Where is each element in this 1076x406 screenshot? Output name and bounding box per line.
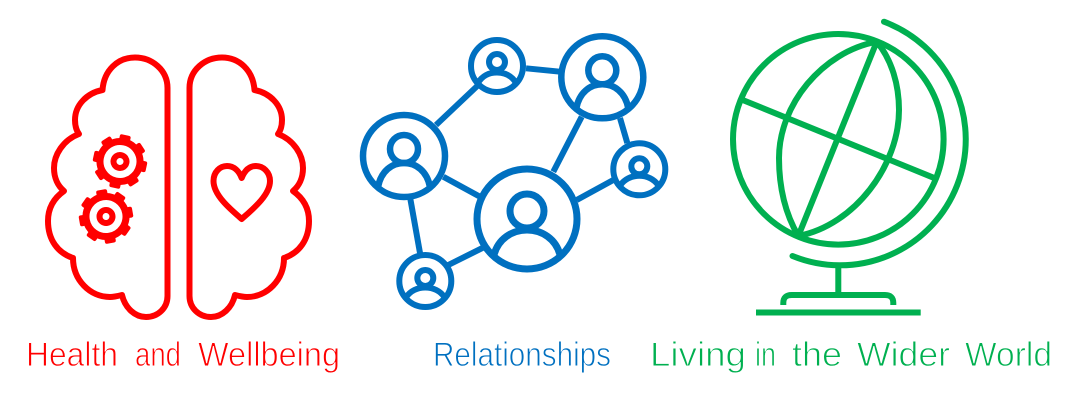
network connecting lines: [410, 68, 627, 265]
person node: right small: [613, 143, 665, 195]
label: Living in the Wider World: Wider: [857, 336, 950, 374]
person node: centre large: [477, 169, 577, 269]
label: Living in the Wider World: Living: [650, 336, 746, 374]
label: Health and Wellbeing: Health: [26, 336, 118, 374]
globe stem: [835, 265, 841, 293]
person node: left: [363, 115, 445, 197]
label: Living in the Wider World: the: [792, 336, 842, 374]
globe base: [783, 295, 893, 305]
person node: bottom small: [399, 255, 451, 307]
globe equator: [743, 100, 935, 178]
label: Health and Wellbeing: [26, 336, 340, 374]
right brain hemisphere: [190, 58, 309, 317]
label: Health and Wellbeing: and: [135, 336, 181, 374]
label: Living in the Wider World: World: [965, 336, 1052, 374]
left brain hemisphere: [48, 58, 168, 317]
globe right meridian: [798, 42, 899, 236]
globe base bar: [756, 310, 921, 316]
icon: heart: [214, 166, 270, 219]
person node: top right: [561, 36, 643, 118]
icon: upper gear: [88, 129, 152, 194]
label: Living in the Wider World: [650, 336, 1052, 374]
globe holder arc: [792, 22, 966, 265]
globe sphere: [733, 34, 944, 245]
icon: desk globe: [733, 22, 966, 312]
icon: brain with gears and heart: [48, 58, 309, 317]
label: Health and Wellbeing: Wellbeing: [198, 336, 340, 374]
globe axis: [798, 42, 877, 236]
globe left meridian: [779, 42, 877, 236]
icon: people network: [363, 36, 665, 307]
person node: top small: [471, 40, 523, 92]
label: Living in the Wider World: in: [755, 336, 776, 374]
label: Relationships: Relationships: [433, 336, 611, 374]
icon: lower gear: [75, 185, 137, 248]
